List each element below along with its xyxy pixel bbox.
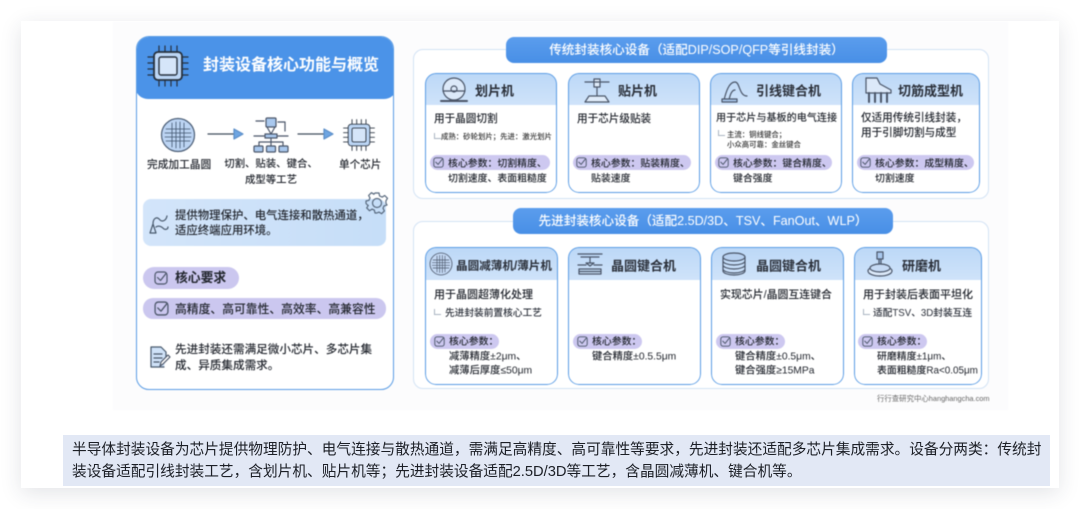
step label: processes: 切割、贴装、键合、 [224,159,318,170]
icon: wafer stack [722,252,746,276]
description: 用于晶圆切割 [434,113,498,125]
step label: chip: 单个芯片 [339,159,381,171]
description: 用于引脚切割与成型 [861,127,956,139]
icon: connections [148,214,170,234]
heading text: 核心要求 [175,270,226,285]
icon: wire bonder [720,80,748,104]
card: trim and form [852,73,980,193]
card header [852,73,980,105]
parameter pill [716,334,785,349]
parameters heading: 核心参数： [877,336,926,348]
summary block [63,435,1050,486]
parameters: 核心参数：切割精度、 [448,158,547,170]
sub note line 2: 小众高可靠：金丝键合 [727,140,801,149]
section heading: advanced: 先进封装核心设备（适配2.5D/3D、TSV、FanOut、WLP） [539,214,867,228]
card title: 晶圆键合机 [756,258,821,274]
parameters line 2: 切割速度、表面粗糙度 [448,174,547,184]
note text: 先进封装还需满足微小芯片、多芯片集 [175,342,372,356]
card: dicing saw [425,73,557,193]
parameter pill [430,334,499,349]
panel: overview [136,36,394,390]
icon: check [862,336,874,348]
icon: process flow [252,116,290,154]
description: 用于封装后表面平坦化 [863,289,973,301]
card: hybrid bonder [711,247,844,385]
elbow marker [718,130,725,136]
parameters line 2: 切割速度 [875,174,915,184]
section heading: traditional: 传统封装核心设备（适配DIP/SOP/QFP等引线封装） [549,43,844,57]
parameter pill [715,155,832,170]
icon: check [434,336,446,348]
card header [710,73,842,105]
icon: gear [364,192,389,215]
icon: chip [146,44,190,88]
card: wire bonder [710,73,842,193]
parameter pill [573,155,691,170]
icon: single chip [342,118,376,152]
arrow [296,128,334,140]
icon: grinder [866,250,894,278]
summary text: 半导体封装设备为芯片提供物理防护、电气连接与散热通道，需满足高精度、高可靠性等要求，先进封装还适配多芯片集成需求。设备分两类：传统封 [72,442,1041,458]
panel: advanced equipment [413,221,989,389]
pill: core requirements [143,298,386,319]
infographic [113,22,1008,410]
card header [854,247,982,280]
icon: trim and form [864,76,892,104]
parameters: 研磨精度±1μm、 [877,352,951,362]
parameters line 2: 贴装速度 [591,174,631,184]
icon: check [154,270,168,286]
parameter pill [573,334,642,349]
source credit: 行行查研究中心hanghangcha.com [877,394,990,403]
card title: 划片机 [475,84,514,98]
elbow marker [434,309,441,315]
card header [425,247,558,280]
icon: wafer [160,117,196,153]
card title: 贴片机 [618,84,657,98]
card header [711,247,844,280]
callout text [174,208,369,236]
icon: check [860,156,872,168]
step label: wafer: 完成加工晶圆 [147,159,211,171]
arrow [206,128,244,140]
card: grinder [854,247,982,385]
icon: check [576,156,588,168]
icon: dicing saw [440,76,468,103]
card title: 晶圆键合机 [611,258,676,274]
parameters line 2: 键合强度 [733,174,773,184]
card title: 切筋成型机 [898,84,963,98]
pill: core requirements heading [143,267,239,289]
sub note: 先进封装前置核心工艺 [445,308,542,319]
step label: processes: 成型等工艺 [245,174,297,186]
parameters line 2: 减薄后厚度≤50μm [449,366,532,376]
description [860,111,967,139]
description: 用于芯片与基板的电气连接 [716,113,837,124]
icon: check [432,156,444,168]
icon: check [576,336,588,348]
note text [174,342,372,372]
callout text: 适应终端应用环境。 [175,224,278,236]
parameters: 核心参数：成型精度、 [875,158,974,170]
parameters heading: 核心参数： [735,336,784,348]
panel title: 封装设备核心功能与概览 [203,57,379,74]
icon: check [718,156,730,168]
icon: check [154,300,170,316]
parameters: 键合精度±0.5μm、 [735,352,821,362]
parameter pill [858,334,927,349]
description: 用于晶圆超薄化处理 [434,289,533,301]
description: 用于芯片级贴装 [577,113,651,125]
icon: wafer bonder [576,252,604,276]
parameters heading: 核心参数： [592,336,641,348]
parameters: 核心参数：键合精度、 [733,158,832,170]
sub note: 主流：铜线键合； [727,130,786,139]
parameters line 2: 表面粗糙度Ra<0.05μm [877,366,978,376]
sub note: 适配TSV、3D封装互连 [873,308,972,319]
card header [425,73,557,105]
icon: document [150,346,172,368]
elbow marker [863,309,870,315]
card title: 引线键合机 [756,84,821,98]
description: 仅适用传统引线封装， [861,112,967,124]
icon: die bonder [584,78,610,104]
callout: function [143,199,386,246]
panel: traditional equipment [413,49,989,199]
parameters: 键合精度±0.5.5μm [592,352,676,362]
parameter pill [430,155,550,170]
icon: wafer [429,252,453,276]
card: wafer thinning [425,247,558,385]
elbow marker [434,133,441,139]
card: wafer bonder [568,247,701,385]
section heading: traditional [506,37,887,63]
card header [568,73,700,105]
summary text [72,441,1041,480]
parameters heading: 核心参数： [449,336,498,348]
parameter pill [857,155,974,170]
parameters: 核心参数：贴装精度、 [591,158,690,170]
icon: check [720,336,732,348]
summary text: 装设备适配引线封装工艺，含划片机、贴片机等；先进封装设备适配2.5D/3D等工艺，含晶圆减薄机、键合机等。 [72,464,802,480]
note text: 成、异质集成需求。 [175,359,279,372]
card: die bonder [568,73,700,193]
callout text: 提供物理保护、电气连接和散热通道， [175,210,369,222]
sub note: 成熟：砂轮划片；先进：激光划片 [441,132,552,141]
card title: 研磨机 [902,258,941,274]
parameters line 2: 键合强度≥15MPa [735,366,814,376]
card title: 晶圆减薄机/薄片机 [456,260,552,272]
panel header [135,35,397,99]
description: 实现芯片/晶圆互连键合 [720,289,832,301]
parameters: 减薄精度±2μm、 [449,352,526,362]
step label: processes [224,157,318,186]
requirement text: 高精度、高可靠性、高效率、高兼容性 [175,302,376,316]
section heading: advanced [513,208,893,234]
card header [568,247,701,280]
